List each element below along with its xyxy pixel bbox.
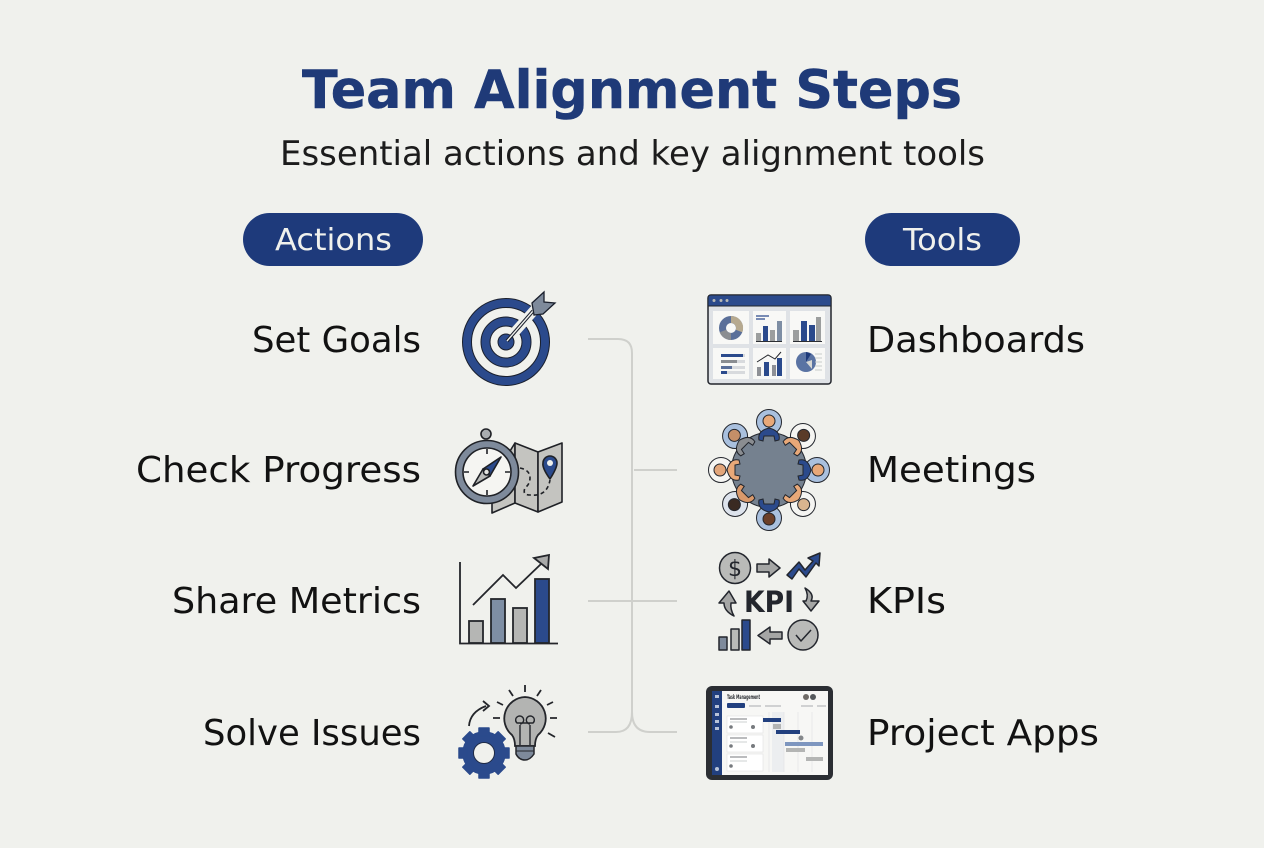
icon: target with arrow [467, 292, 555, 381]
icon: meeting table with people [708, 410, 830, 530]
pill: Tools: Tools [902, 223, 982, 258]
title: Team Alignment Steps [302, 60, 962, 121]
pill: Actions [243, 213, 423, 266]
icon: project app tablet: Task Management [727, 694, 760, 701]
label: Project Apps: Project Apps [867, 713, 1099, 754]
icon: gear and lightbulb [459, 685, 557, 778]
subtitle: Essential actions and key alignment tools [280, 134, 985, 174]
label: Set Goals: Set Goals [252, 320, 421, 361]
label: Meetings: Meetings [867, 450, 1036, 491]
label: Dashboards: Dashboards [867, 320, 1085, 361]
pill: Tools [865, 213, 1020, 266]
icon: KPI cycle [719, 552, 820, 650]
icon: project app tablet [706, 686, 833, 780]
icon: compass and map [456, 429, 562, 513]
pill: Actions: Actions [275, 223, 392, 258]
label: Solve Issues: Solve Issues [203, 713, 421, 754]
icon: KPI cycle: KPI [744, 585, 794, 619]
icon: KPI cycle: $ [728, 557, 742, 582]
label: Share Metrics: Share Metrics [172, 581, 421, 622]
label: KPIs: KPIs [867, 581, 946, 622]
icon: rising bar chart [460, 555, 558, 644]
connector lines [588, 339, 677, 732]
icon: dashboard window [708, 295, 831, 384]
label: Check Progress: Check Progress [136, 450, 421, 491]
